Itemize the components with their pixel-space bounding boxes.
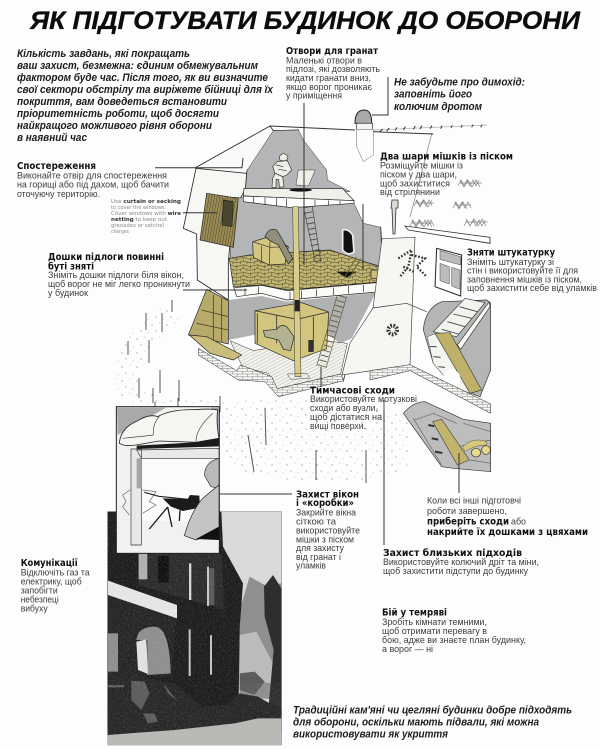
label: Комунікації: запобігти <box>21 585 58 596</box>
label: Два шари мішків: піском у два шари, <box>380 169 457 180</box>
closing italic note: для оборони, оскільки мають підвали, які можна <box>293 716 539 728</box>
intro text block: ваш захист, безмежна: єдиним обмежувальним <box>17 60 258 72</box>
label: Спостереження <box>17 161 169 200</box>
bullet damage lower <box>388 326 397 334</box>
arched opening <box>136 627 171 675</box>
callout: chimney: Не забудьте про димохід: <box>394 77 525 89</box>
label: Захист близьких підходів: Використовуйте колючий дріт та міни, <box>383 557 539 568</box>
label: Тимчасові сходи: сходи або вузли, <box>310 403 378 414</box>
label: Бій у темряві: Бій у темряві <box>382 608 447 619</box>
street <box>108 718 281 745</box>
callout: chimney <box>394 77 525 113</box>
label: Отвори для гранат <box>286 46 380 102</box>
label: Отвори для гранат: якщо ворог проникає <box>286 82 372 93</box>
label: Зняти штукатурку: заповнення мішків із піском, <box>467 274 582 285</box>
label: Дошки підлоги <box>48 252 190 299</box>
photo: ruined building <box>108 512 282 745</box>
far ruin peak <box>239 577 281 700</box>
chimney <box>270 110 487 162</box>
left outer wall <box>183 168 247 300</box>
label: Захист вікон: використовуйте <box>296 525 360 536</box>
bright opening <box>136 639 148 674</box>
wall hole <box>343 230 354 254</box>
sandbag scraps <box>463 440 487 452</box>
label: Комунікації: вибуху <box>21 603 48 614</box>
note: remove stairs: або <box>511 517 526 528</box>
stippled ground and fence posts <box>127 300 410 483</box>
soldier helmet <box>204 458 219 488</box>
label: Зняти штукатурку <box>467 248 597 294</box>
stair well <box>423 300 491 397</box>
small crates <box>371 270 382 278</box>
middle crates <box>253 236 288 265</box>
label: Два шари мішків: від стрілянини <box>380 187 440 198</box>
label: Спостереження: Виконайте отвір для спостереження <box>17 170 167 182</box>
label: Захист вікон: Захист вікон <box>296 489 359 500</box>
label: Тимчасові сходи <box>310 386 417 432</box>
small English note: charges <box>111 229 129 235</box>
label: Захист вікон: і «коробки» <box>296 498 354 509</box>
stair steps <box>433 298 485 337</box>
label: Захист близьких підходів <box>383 548 539 577</box>
label: Захист вікон: Закрийте вікна <box>296 508 357 519</box>
upper windows <box>139 553 214 606</box>
inset frame <box>116 407 219 553</box>
upper ladder rails <box>303 207 321 262</box>
lower yellow shelter <box>255 303 329 361</box>
small English note: Use curtain or sacking <box>111 199 181 205</box>
label: Два шари мішків <box>380 151 513 198</box>
label: Захист вікон <box>296 489 360 572</box>
label: Бій у темряві: а ворог — ні <box>382 644 433 655</box>
label: Комунікації: Комунікації <box>21 558 78 569</box>
small English note: to cover the windows. <box>111 205 166 211</box>
machine gun <box>144 492 200 529</box>
far tower <box>264 575 281 715</box>
rubble lights <box>108 672 265 723</box>
illustration: house cutaway <box>183 126 384 397</box>
small English note: Cover windows with wire <box>111 211 182 217</box>
photo sky and base <box>108 512 282 745</box>
annex corner wall <box>342 237 415 375</box>
soldier shadow <box>196 527 219 540</box>
middle floor joists <box>234 282 383 300</box>
closing italic note: використовувати як укриття <box>293 728 448 740</box>
floor trapdoor <box>336 272 357 278</box>
closing italic note: Традиційні кам'яні чи цегляні будинки добре підходять <box>293 704 572 716</box>
upper ladder rungs <box>308 207 318 262</box>
grenade hole <box>289 188 312 192</box>
window frame <box>131 448 219 545</box>
far ruin light smoke <box>240 632 273 683</box>
window opening <box>142 459 219 521</box>
lower windows <box>108 629 212 676</box>
middle room back wall <box>230 197 382 267</box>
label: Тимчасові сходи: щоб дістатися на <box>310 412 383 423</box>
yellow plank lower <box>433 419 469 465</box>
photo grain <box>108 512 282 745</box>
label: Комунікації: Відключіть газ та <box>21 567 90 578</box>
label: Захист вікон: мішки з піском <box>296 534 354 545</box>
soldier body <box>184 485 219 540</box>
lower stair flight <box>427 333 470 393</box>
leader lines <box>155 77 459 545</box>
barrels <box>471 446 490 457</box>
lower soldier <box>263 325 294 351</box>
upper wall tone <box>138 552 225 610</box>
label: Зняти штукатурку: Зніміть штукатурку зі <box>467 257 554 268</box>
note: remove stairs: приберіть сходи <box>427 517 509 528</box>
label: Дошки підлоги: Дошки підлоги повинні <box>48 252 164 263</box>
label: Бій у темряві <box>382 608 526 655</box>
label: Отвори для гранат: у приміщення <box>286 91 342 102</box>
label: Захист близьких підходів: Захист близьких підходів <box>383 548 522 559</box>
intro text block: Кількість завдань, які покращать <box>17 48 190 60</box>
stair rail <box>457 302 490 349</box>
note: remove stairs: Коли всі інші підготовчі <box>427 495 521 506</box>
sky corner <box>117 408 219 435</box>
label: Спостереження: Спостереження <box>17 161 96 172</box>
bullet damage upper <box>398 250 427 277</box>
label: Зняти штукатурку: стін і використовуйте її для <box>467 266 578 276</box>
title: ЯК ПІДГОТУВАТИ БУДИНОК ДО ОБОРОНИ <box>29 7 581 35</box>
right outer wall <box>343 227 384 382</box>
closing italic note <box>293 704 572 740</box>
label: Бій у темряві: Зробіть кімнати темними, <box>382 617 487 628</box>
label: Захист вікон: сіткою та <box>296 517 337 528</box>
sandbags <box>119 409 219 446</box>
small English note: grenades or satchel <box>111 223 164 229</box>
trapdoor ladder <box>345 257 361 278</box>
lower steps <box>428 425 442 453</box>
yellow plank upper <box>435 333 482 393</box>
left wall under frieze <box>108 595 176 677</box>
small English note <box>111 199 182 235</box>
attic crate <box>296 170 315 186</box>
label: Тимчасові сходи: Тимчасові сходи <box>310 386 395 397</box>
label: Отвори для гранат: Отвори для гранат <box>286 46 378 57</box>
label: Захист вікон: для захисту <box>296 543 344 554</box>
lintel <box>137 438 219 449</box>
label: Два шари мішків: Розміщуйте мішки із <box>380 160 463 171</box>
label: Бій у темряві: бою, адже ви знаєте план будинку, <box>382 635 526 646</box>
intro text block: в наявний час <box>17 132 87 144</box>
roof <box>196 126 298 175</box>
main building mass <box>108 512 243 730</box>
soldier behind crates <box>265 229 293 264</box>
lower floor <box>230 340 347 389</box>
lower window shelf <box>189 335 242 360</box>
lower ladder <box>317 295 347 368</box>
wall cracks <box>123 490 156 515</box>
label: Два шари мішків: Два шари мішків із піском <box>380 151 513 162</box>
note: remove stairs <box>427 495 588 538</box>
attic back wall <box>244 130 350 192</box>
rubble <box>108 672 281 737</box>
note: remove stairs: накрийте їх дошками з цвяхами <box>427 527 588 538</box>
intro text block <box>17 48 274 144</box>
label: Комунікації <box>21 558 90 614</box>
callout: chimney: колючим дротом <box>394 101 482 113</box>
label: Комунікації: електрику, щоб <box>21 576 82 587</box>
corner ledge <box>373 303 427 312</box>
label: Захист близьких підходів: щоб захистити підступи до будинку <box>383 566 528 577</box>
attic floor <box>243 188 354 201</box>
label: Отвори для гранат: підлозі, які дозволяють <box>286 64 380 75</box>
label: Бій у темряві: щоб отримати перевагу в <box>382 626 487 637</box>
label: Спостереження: оточуючу територію. <box>17 189 100 200</box>
intro text block: свої сектори обстрілу та виріжете бійниці для їх <box>17 84 274 96</box>
inset: machine gunner at window <box>116 407 219 553</box>
annex eave <box>405 226 490 243</box>
barbed wire on right roof <box>410 133 488 227</box>
left wall foundation <box>198 348 344 397</box>
label: Тимчасові сходи: Використовуйте мотузкові <box>310 394 417 405</box>
label: Дошки підлоги: щоб ворог не міг легко проникнути <box>48 279 190 290</box>
central post <box>293 207 301 377</box>
label: Тимчасові сходи: вищі поверхи. <box>310 421 366 432</box>
label: Дошки підлоги: у будинок <box>48 288 89 299</box>
lower stairwell <box>403 402 491 472</box>
annex window <box>435 248 462 296</box>
attic joists <box>243 196 354 208</box>
middle floor boards <box>229 250 382 290</box>
lower window <box>188 289 228 344</box>
label: Спостереження: на горищі або під дахом, щоб бачити <box>17 180 169 190</box>
small English note: netting to keep out <box>111 217 167 223</box>
label: Два шари мішків: щоб захиститися <box>380 178 450 189</box>
callout: chimney: заповніть його <box>394 89 472 101</box>
upper window <box>200 193 238 247</box>
label: Комунікації: небезпеці <box>21 594 59 605</box>
lower room back wall <box>228 293 376 343</box>
lamp post detail <box>391 200 398 234</box>
white blur <box>443 370 460 387</box>
illustration: annex and stairs <box>342 226 491 472</box>
label: Отвори для гранат: Маленькі отвори в <box>286 55 362 66</box>
white frieze <box>108 581 177 618</box>
label: Захист вікон: від гранат і <box>296 552 341 563</box>
label: Отвори для гранат: кидати гранати вниз, <box>286 73 371 84</box>
annex foundation <box>370 365 491 413</box>
note: remove stairs: роботи завершено, <box>427 506 507 517</box>
label: Дошки підлоги: буті зняті <box>48 262 94 272</box>
frame shade <box>137 458 141 488</box>
intro text block: найкращого можливого рівня оборони <box>17 120 212 132</box>
label: Дошки підлоги: Зніміть дошки підлоги біля вікон, <box>48 270 184 281</box>
intro text block: пріоритетність роботи, щоб досягти <box>17 108 219 120</box>
intro text block: покриття, вам доведеться встановити <box>17 96 227 108</box>
intro text block: фактором буде час. Після того, як ви визначите <box>17 72 268 84</box>
label: Зняти штукатурку: Зняти штукатурку <box>467 248 556 259</box>
label: Захист вікон: уламків <box>296 561 326 572</box>
soldier in attic <box>272 154 292 187</box>
